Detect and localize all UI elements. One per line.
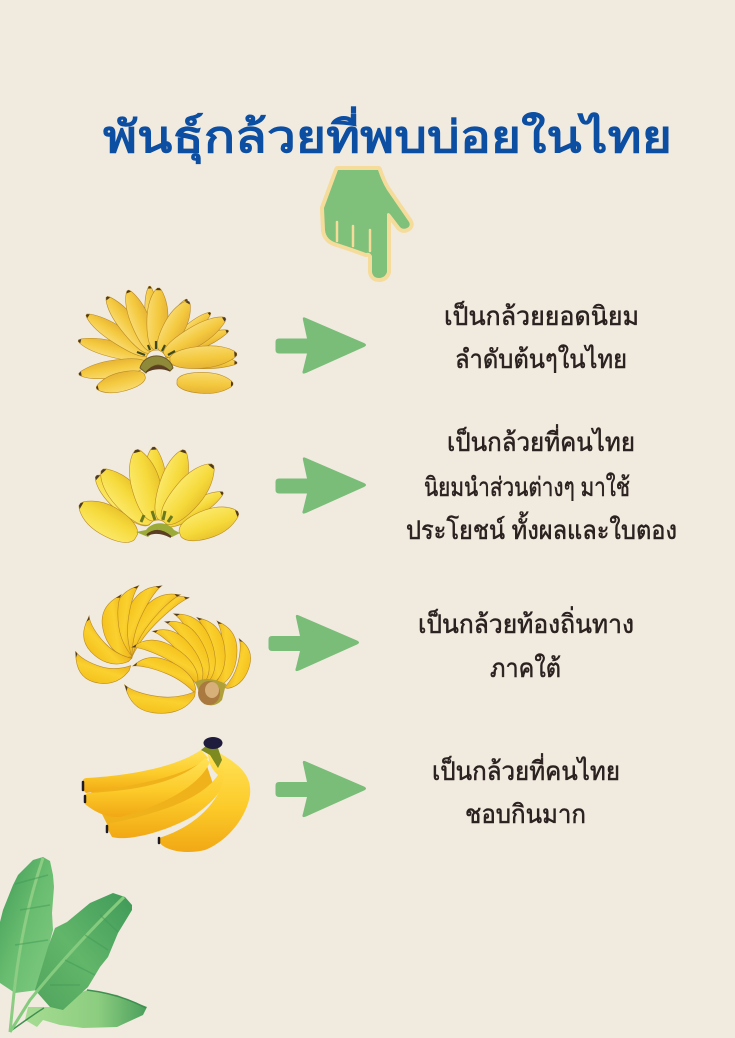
text: description 4: เป็นกล้วยที่คนไทย xyxy=(432,753,620,786)
banana bunch 3 xyxy=(68,577,256,718)
banana crown xyxy=(140,356,173,373)
banana stem xyxy=(195,679,226,705)
arrow 1 xyxy=(276,317,366,374)
leaf right xyxy=(35,893,132,1010)
text: description 1: ลำดับต้นๆในไทย xyxy=(455,344,627,374)
leaf back xyxy=(25,990,147,1028)
text: description 3 xyxy=(418,606,634,683)
banana crown xyxy=(136,523,180,537)
banana bunch 4 xyxy=(83,737,250,852)
title: พันธุ์กล้วยที่พบบ่อยในไทย xyxy=(103,106,672,165)
text: description 3: ภาคใต้ xyxy=(490,653,561,683)
text: description 2: เป็นกล้วยที่คนไทย xyxy=(447,424,635,457)
text: description 2: นิยมนำส่วนต่างๆ มาใช้ xyxy=(424,472,630,502)
leaf left xyxy=(0,857,54,993)
banana bunch 1 xyxy=(76,286,238,397)
arrow 3 xyxy=(268,615,359,671)
banana stem xyxy=(204,737,222,749)
icon: pointing hand xyxy=(324,170,410,278)
text: description 1 xyxy=(444,300,639,374)
banana leaves xyxy=(0,857,147,1032)
text: description 3: เป็นกล้วยท้องถิ่นทาง xyxy=(418,606,634,639)
arrow 2 xyxy=(276,457,366,514)
text: description 2: ประโยชน์ ทั้งผลและใบตอง xyxy=(406,511,677,545)
text: description 4: ชอบกินมาก xyxy=(465,799,586,829)
arrow 4 xyxy=(276,761,366,817)
text: description 2 xyxy=(406,424,677,545)
text: description 1: เป็นกล้วยยอดนิยม xyxy=(444,300,639,331)
banana bunch 2 xyxy=(72,446,243,550)
text: description 4 xyxy=(432,753,620,829)
